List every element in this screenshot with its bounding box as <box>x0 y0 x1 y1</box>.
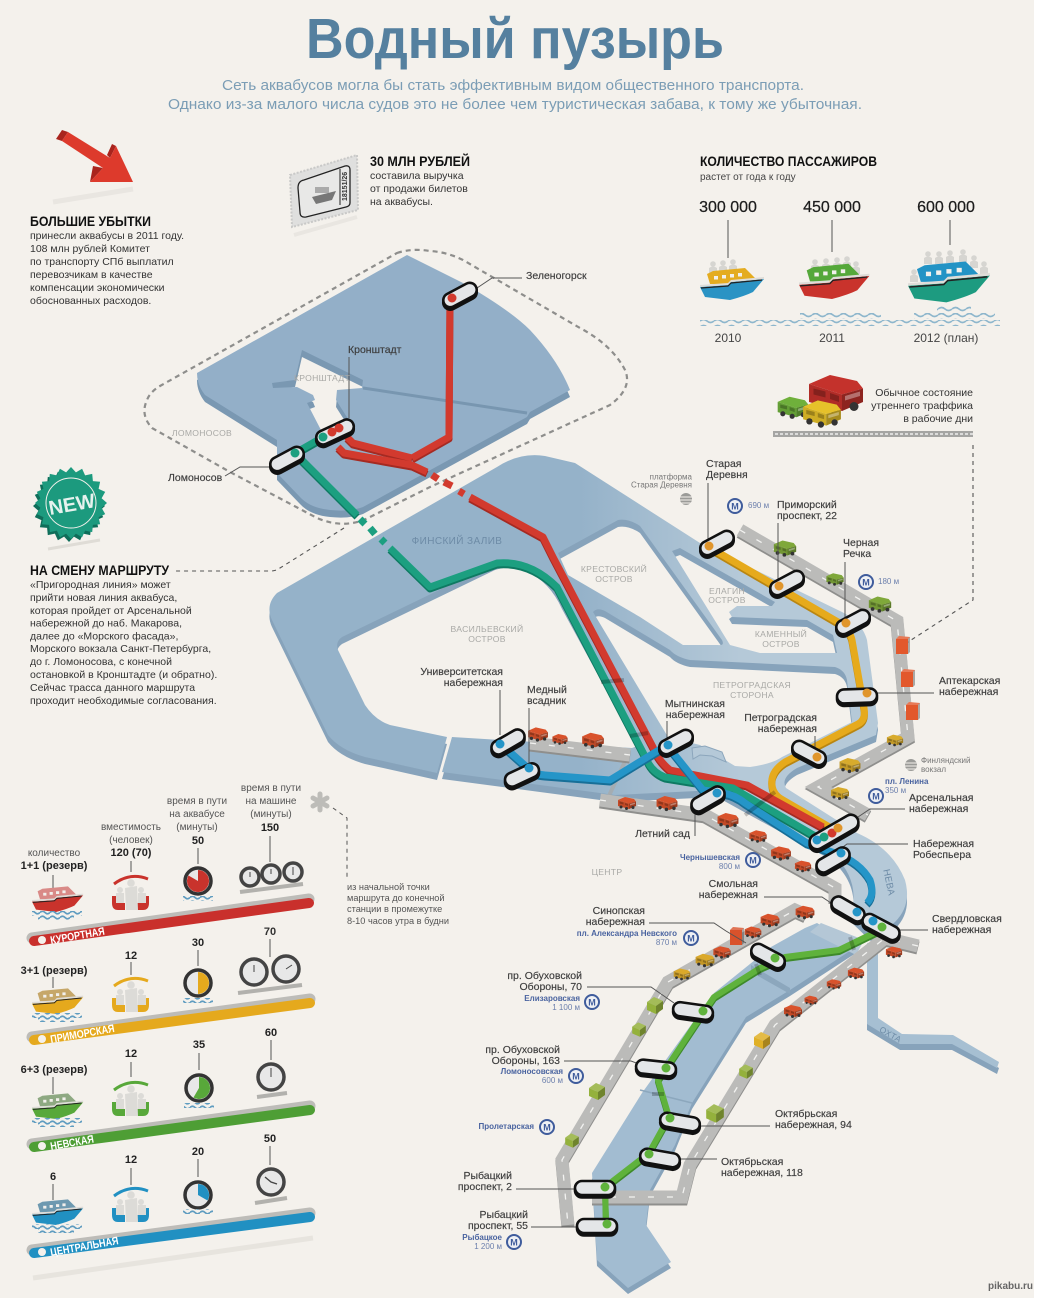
label: Robespierre: Набережная <box>913 838 974 850</box>
area labels: ЦЕНТР <box>592 867 622 877</box>
column headers: время в пути <box>241 783 301 794</box>
icon: NEW badge <box>33 467 107 549</box>
label: Smolnaya: Смольная <box>709 878 758 890</box>
metro: Chernaya Rechka: М <box>862 578 870 588</box>
column headers: вместимость <box>101 822 161 833</box>
metro: Staraya Derevnya: М <box>731 502 739 512</box>
icon: red arrow <box>53 130 133 202</box>
metro: Elizarovskaya <box>524 994 599 1012</box>
label: Bronze Horseman: всадник <box>527 695 566 707</box>
text: replacement route <box>30 563 217 707</box>
stations <box>268 280 902 1235</box>
station: Bronze Horseman <box>503 761 541 791</box>
metro: Elizarovskaya: М <box>588 998 596 1008</box>
column headers: (человек) <box>109 835 153 846</box>
metro: Chernaya Rechka <box>859 575 899 589</box>
row: Kurortnaya: 150 <box>261 822 279 834</box>
station labels <box>168 270 1002 1232</box>
metro: Rybatskoye: Рыбацкое <box>462 1233 503 1242</box>
station: Obukhov 70 <box>672 1001 714 1023</box>
area labels: ОСТРОВ <box>708 595 746 605</box>
metro markers <box>462 499 929 1251</box>
label: Rybatsky 55: проспект, 55 <box>468 1220 528 1232</box>
text: big losses <box>30 214 184 307</box>
text: revenue: составила выручка <box>370 170 464 182</box>
text: big losses: 108 млн рублей Комитет <box>30 243 150 255</box>
panel: traffic note <box>773 375 973 642</box>
row: Nevskaya: 6+3 (резерв) <box>21 1064 88 1076</box>
text: big losses: по транспорту СПб выплатил <box>30 256 174 268</box>
area labels: КРЕСТОВСКИЙ <box>581 563 647 574</box>
metro: Alexander Nevsky Square <box>577 929 698 947</box>
values <box>699 199 975 216</box>
metro: Elizarovskaya: 1 100 м <box>552 1003 580 1012</box>
metro: Alexander Nevsky Square: М <box>687 934 695 944</box>
text: replacement route: далее до «Морского фасада», <box>30 630 178 642</box>
cars: embankment <box>528 727 814 959</box>
heading: passengers <box>700 154 877 183</box>
Kronstadt water <box>197 255 570 518</box>
row: Primorskaya: 70 <box>264 926 276 938</box>
metro: Lenin Square: пл. Ленина <box>885 777 929 786</box>
label: Petrogradskaya: Петроградская <box>744 712 817 724</box>
metro: Staraya Derevnya: 690 м <box>748 501 769 510</box>
station: Summer Garden <box>689 784 727 817</box>
years: 2011 <box>819 331 845 345</box>
years: 2010 <box>715 331 742 345</box>
station: University <box>489 727 527 760</box>
station: Aptekarskaya <box>837 688 877 706</box>
area labels: ОСТРОВ <box>468 634 506 644</box>
metro: Lomonosovskaya: Ломоносовская <box>501 1067 563 1076</box>
subtitle: Сеть аквабусов могла бы стать эффективным видом общественного транспорта. <box>222 77 804 94</box>
station: Robespierre <box>814 845 852 878</box>
cars: yellow-green left road <box>565 954 714 1148</box>
values: 600 000 <box>917 199 975 216</box>
traffic text: в рабочие дни <box>903 413 973 425</box>
boat 2012 <box>908 249 990 302</box>
text: replacement route: НА СМЕНУ МАРШРУТУ <box>30 563 170 578</box>
station: Smolnaya <box>829 894 867 927</box>
text: big losses: компенсации экономически <box>30 282 165 294</box>
text: replacement route: набережной до наб. Макарова, <box>30 618 182 630</box>
column headers: (минуты) <box>250 809 292 820</box>
metro: Lomonosovskaya <box>501 1067 583 1085</box>
area labels: СТОРОНА <box>730 690 774 700</box>
row: Nevskaya: 35 <box>193 1039 205 1051</box>
area labels: ОХТА <box>878 1024 903 1045</box>
station: Petrogradskaya <box>790 738 828 770</box>
label: Petrogradskaya: набережная <box>758 723 817 735</box>
text: revenue: 30 МЛН РУБЛЕЙ <box>370 154 470 169</box>
cars: yellow, north <box>831 735 903 800</box>
panel: routes table <box>21 783 449 1278</box>
metro: Elizarovskaya: Елизаровская <box>524 994 580 1003</box>
metro: Rybatskoye: 1 200 м <box>474 1242 502 1251</box>
text: replacement route: остановкой в Кронштадте (и обратно). <box>30 669 217 681</box>
area labels: ЕЛАГИН <box>709 586 745 596</box>
label: Robespierre: Робеспьера <box>913 849 971 861</box>
station: Chernaya Rechka <box>834 607 872 639</box>
area labels: ОСТРОВ <box>595 574 633 584</box>
label: Arsenalnaya: набережная <box>909 803 968 815</box>
years <box>715 331 978 345</box>
label: Staraya Derevnya: Деревня <box>706 469 748 481</box>
area labels: КАМЕННЫЙ <box>755 628 807 639</box>
text: replacement route: которая пройдет от Арсенальной <box>30 605 192 617</box>
metro: Staraya Derevnya <box>728 499 769 513</box>
route: blue <box>500 743 872 905</box>
label: Oktyabrskaya 94: набережная, 94 <box>775 1119 852 1131</box>
column headers: на аквабусе <box>169 808 225 820</box>
label: Sinopskaya: Синопская <box>593 905 645 917</box>
row: Primorskaya: 30 <box>192 937 204 949</box>
icon: cars <box>778 375 863 428</box>
metro: Rybatskoye: М <box>510 1238 518 1248</box>
column headers: время в пути <box>167 796 227 807</box>
label: University embankment: набережная <box>444 677 503 689</box>
station: Primorsky <box>768 568 806 600</box>
area labels: ЛОМОНОСОВ <box>172 428 232 438</box>
map: routes <box>295 298 880 1225</box>
label: Obukhov 163: Обороны, 163 <box>492 1055 560 1067</box>
footnote: маршрута до конечной <box>347 893 445 903</box>
icon: ticket: 18151/26 <box>342 172 349 201</box>
area labels: ВАСИЛЬЕВСКИЙ <box>450 623 524 634</box>
text: replacement route: проходит необходимые согласования. <box>30 695 217 707</box>
row: Primorskaya: ПРИМОРСКАЯ <box>49 1023 116 1046</box>
station: Obukhov 163 <box>635 1059 677 1080</box>
metro: Lomonosovskaya: М <box>572 1072 580 1082</box>
text: replacement route: «Пригородная линия» может <box>30 579 171 591</box>
label: Summer Garden: Летний сад <box>635 828 690 840</box>
row: Kurortnaya: 1+1 (резерв) <box>21 860 88 872</box>
source mark: pikabu.ru <box>988 1281 1033 1292</box>
icon: Finland station: Финляндский <box>921 756 970 765</box>
row: Tsentralnaya: 12 <box>125 1154 137 1166</box>
label: Chernaya Rechka: Черная <box>843 537 879 549</box>
traffic text: утреннего траффика <box>871 400 973 412</box>
metro: Chernyshevskaya: 800 м <box>719 862 740 871</box>
metro: Chernyshevskaya: М <box>749 856 757 866</box>
label: Mytninskaya: набережная <box>666 709 725 721</box>
label: Zelenogorsk: Зеленогорск <box>526 270 587 282</box>
footnote: 8-10 часов утра в будни <box>347 916 449 926</box>
station: Sinopskaya <box>749 941 787 973</box>
route: red <box>338 298 823 829</box>
cars: orange, north <box>896 636 920 720</box>
text: revenue: от продажи билетов <box>370 183 468 195</box>
dashed Kronstadt outline <box>144 250 627 524</box>
row: Tsentralnaya <box>32 1133 313 1278</box>
metro: Chernyshevskaya <box>680 853 760 871</box>
route: lime <box>605 930 880 1225</box>
label: Arsenalnaya: Арсенальная <box>909 792 974 804</box>
route: orange <box>709 547 864 831</box>
route: teal <box>295 437 817 839</box>
leader lines <box>225 278 934 1227</box>
label: Smolnaya: набережная <box>699 889 758 901</box>
map: roads <box>530 530 918 1227</box>
station: Mytninskaya <box>657 727 695 759</box>
label: Staraya Derevnya: Старая <box>706 458 741 470</box>
boat 2011 <box>799 256 869 299</box>
subtitle <box>168 77 862 113</box>
Gulf and Neva water <box>269 455 907 945</box>
column headers: количество <box>28 848 81 859</box>
station: Arsenalnaya <box>807 812 861 854</box>
text: big losses: обоснованных расходов. <box>30 295 151 307</box>
icon: Staraya Derevnya railway platform: Старая Деревня <box>631 480 692 490</box>
icon: Staraya Derevnya railway platform: платформа <box>650 472 693 482</box>
label: Rybatsky 2: проспект, 2 <box>458 1181 512 1193</box>
label: Sverdlovskaya: Свердловская <box>932 913 1002 925</box>
text: revenue <box>370 154 470 208</box>
row: Tsentralnaya: ЦЕНТРАЛЬНАЯ <box>49 1235 120 1259</box>
station: Sverdlovskaya <box>860 911 902 945</box>
metro: Lenin Square: 350 м <box>885 786 906 795</box>
station: Oktyabrskaya 118 <box>639 1148 681 1171</box>
row: Kurortnaya: 50 <box>192 835 204 847</box>
years: 2012 (план) <box>914 331 978 345</box>
label: Mytninskaya: Мытнинская <box>665 698 725 710</box>
label: Sverdlovskaya: набережная <box>932 924 991 936</box>
heading: passengers: растет от года к году <box>700 172 796 183</box>
metro: Proletarskaya: Пролетарская <box>479 1122 534 1131</box>
station: Rybatsky 2 <box>575 1181 615 1198</box>
label: Obukhov 70: Обороны, 70 <box>519 981 582 993</box>
map: cars <box>528 541 920 1148</box>
label: Kronstadt: Кронштадт <box>348 344 402 356</box>
label: Oktyabrskaya 118: Октябрьская <box>721 1156 783 1168</box>
metro: Alexander Nevsky Square: 870 м <box>656 938 677 947</box>
text: replacement route: прийти новая линия аквабуса, <box>30 592 177 604</box>
footnote: из начальной точки <box>347 882 430 892</box>
label: University embankment: Университетская <box>420 666 503 678</box>
label: Primorsky: Приморский <box>777 499 837 511</box>
row: Kurortnaya <box>21 822 309 947</box>
label: Oktyabrskaya 94: Октябрьская <box>775 1108 837 1120</box>
metro: Rybatskoye <box>462 1233 521 1251</box>
traffic text: Обычное состояние <box>875 387 973 399</box>
icon: Finland station: вокзал <box>921 765 946 774</box>
station: Kronstadt <box>314 417 356 449</box>
boat 2010 <box>700 259 764 300</box>
area labels: ОСТРОВ <box>762 639 800 649</box>
heading: passengers: КОЛИЧЕСТВО ПАССАЖИРОВ <box>700 154 877 169</box>
label: Obukhov 70: пр. Обуховской <box>507 970 582 982</box>
area labels: ФИНСКИЙ ЗАЛИВ <box>412 534 502 547</box>
metro: Lenin Square: М <box>872 792 880 802</box>
station: Staraya Derevnya <box>698 528 736 560</box>
row: Nevskaya: НЕВСКАЯ <box>49 1133 95 1153</box>
text: big losses: БОЛЬШИЕ УБЫТКИ <box>30 214 151 229</box>
label: Chernaya Rechka: Речка <box>843 548 871 560</box>
footnote: станции в промежутке <box>347 904 442 914</box>
area labels: КРОНШТАДТ <box>294 373 350 383</box>
icon: ticket <box>290 155 358 235</box>
label: Aptekarskaya: Аптекарская <box>939 675 1000 687</box>
station: Zelenogorsk <box>441 280 479 312</box>
row: Primorskaya: 3+1 (резерв) <box>21 965 88 977</box>
column headers: на машине <box>246 796 297 807</box>
values: 300 000 <box>699 199 757 216</box>
text: big losses: перевозчикам в качестве <box>30 269 153 281</box>
station: Oktyabrskaya 94 <box>659 1112 701 1135</box>
metro: Chernaya Rechka: 180 м <box>878 577 899 586</box>
Lower Neva water <box>592 923 864 1294</box>
label: Rybatsky 55: Рыбацкий <box>479 1209 528 1221</box>
area labels: НЕВА <box>880 868 897 897</box>
column headers: (минуты) <box>176 822 218 833</box>
icon: Finland station <box>905 756 970 774</box>
metro: Proletarskaya: М <box>543 1122 551 1132</box>
metro: Chernyshevskaya: Чернышевская <box>680 853 740 862</box>
text: replacement route: Сейчас трасса данного маршрута <box>30 682 195 694</box>
icon: NEW badge: NEW <box>47 490 97 520</box>
row: Nevskaya: 12 <box>125 1048 137 1060</box>
row: Tsentralnaya: 6 <box>50 1171 56 1183</box>
text: big losses: принесли аквабусы в 2011 году. <box>30 230 184 242</box>
label: Sinopskaya: набережная <box>586 916 645 928</box>
column headers <box>28 783 301 859</box>
icon: asterisk <box>313 794 327 810</box>
values: 450 000 <box>803 199 861 216</box>
metro: Lomonosovskaya: 600 м <box>542 1076 563 1085</box>
station: Rybatsky 55 <box>577 1219 617 1236</box>
area labels: ПЕТРОГРАДСКАЯ <box>713 680 791 690</box>
metro: Lenin Square <box>869 777 929 803</box>
icon: Staraya Derevnya railway platform <box>631 472 693 505</box>
row: Primorskaya: 12 <box>125 950 137 962</box>
station: Lomonosov <box>268 444 306 476</box>
label: Lomonosov: Ломоносов <box>168 472 223 484</box>
waves <box>700 306 1000 326</box>
cars: right road <box>706 947 902 1123</box>
Okhta river <box>867 943 999 1074</box>
label: Aptekarskaya: набережная <box>939 686 998 698</box>
area labels <box>172 373 903 1045</box>
row: Kurortnaya: 120 (70) <box>111 847 152 859</box>
label: Obukhov 163: пр. Обуховской <box>485 1044 560 1056</box>
label: Oktyabrskaya 118: набережная, 118 <box>721 1167 803 1179</box>
title: Водный пузырь <box>306 7 724 71</box>
label: Rybatsky 2: Рыбацкий <box>463 1170 512 1182</box>
label: Primorsky: проспект, 22 <box>777 510 837 522</box>
subtitle: Однако из-за малого числа судов это не более чем туристическая забава, к тому же убыточная. <box>168 96 862 113</box>
text: revenue: на аквабусы. <box>370 196 433 208</box>
row: Nevskaya <box>21 1027 310 1153</box>
row: Primorskaya <box>21 926 310 1046</box>
map: water <box>197 255 999 1294</box>
row: Nevskaya: 60 <box>265 1027 277 1039</box>
metro: Alexander Nevsky Square: пл. Александра Невского <box>577 929 677 938</box>
label: Bronze Horseman: Медный <box>527 684 567 696</box>
panel: passengers count <box>699 154 1000 345</box>
cars: green, north <box>774 541 891 613</box>
metro: Proletarskaya <box>479 1120 554 1134</box>
row: Kurortnaya: КУРОРТНАЯ <box>49 926 106 947</box>
row: Tsentralnaya: 50 <box>264 1133 276 1145</box>
text: replacement route: до г. Ломоносова, с конечной <box>30 656 172 668</box>
text: replacement route: Морского вокзала Санкт-Петербурга, <box>30 643 211 655</box>
row: Tsentralnaya: 20 <box>192 1146 204 1158</box>
